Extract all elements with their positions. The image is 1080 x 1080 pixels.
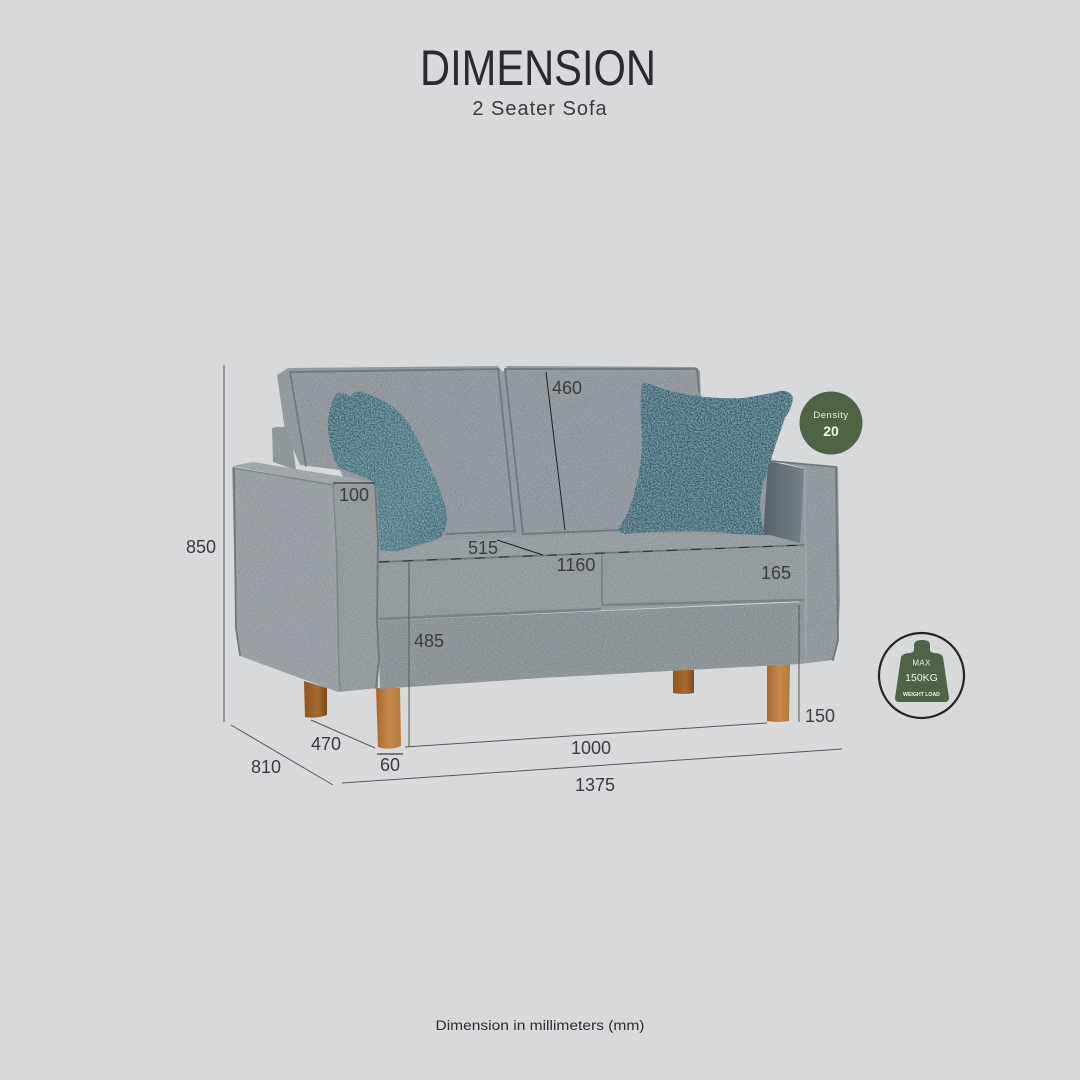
dimension labels: 515 [468,538,498,558]
dimension labels: 1000 [571,738,611,758]
density badge: Density [813,410,849,421]
dimension labels: 1160 [557,555,595,575]
back left leg [304,681,327,718]
density badge [800,392,862,454]
dimension labels: 470 [311,734,341,754]
right arm [770,460,840,664]
dimension labels: 810 [251,757,281,777]
left pillow [328,392,447,551]
dimension labels: 150 [805,706,835,726]
dimension labels: 485 [414,631,444,651]
seat cushion front [378,544,804,621]
front left leg [376,688,401,749]
dimension labels [186,378,835,795]
front right leg [767,664,790,722]
dimension labels: 165 [761,563,791,583]
dimension labels: 1375 [575,775,615,795]
left rear arm stub [272,427,296,470]
left arm top [232,462,375,485]
left arm front [234,468,379,692]
back right leg [673,670,694,694]
left arm side face [232,467,338,692]
dimension labels: 60 [380,755,400,775]
dimension lines [224,365,842,785]
dimension labels: 460 [552,378,582,398]
sofa illustration [232,366,840,749]
right arm inner face [763,461,806,545]
subtitle: 2 Seater Sofa [472,98,608,120]
seat top [378,533,804,563]
weight load badge: MAX [912,658,931,668]
icon: weight [895,640,949,702]
dimension labels: 850 [186,537,216,557]
density badge: 20 [823,423,839,439]
back cushions [277,366,770,556]
weight load badge: WEIGHT LOAD [903,692,940,698]
footer note: Dimension in millimeters (mm) [436,1018,644,1033]
title: DIMENSION [420,40,656,96]
base front [378,602,804,689]
weight load badge [879,633,964,718]
dimension labels: 100 [339,485,369,505]
weight load badge: 150KG [905,672,938,684]
right pillow [619,383,793,535]
